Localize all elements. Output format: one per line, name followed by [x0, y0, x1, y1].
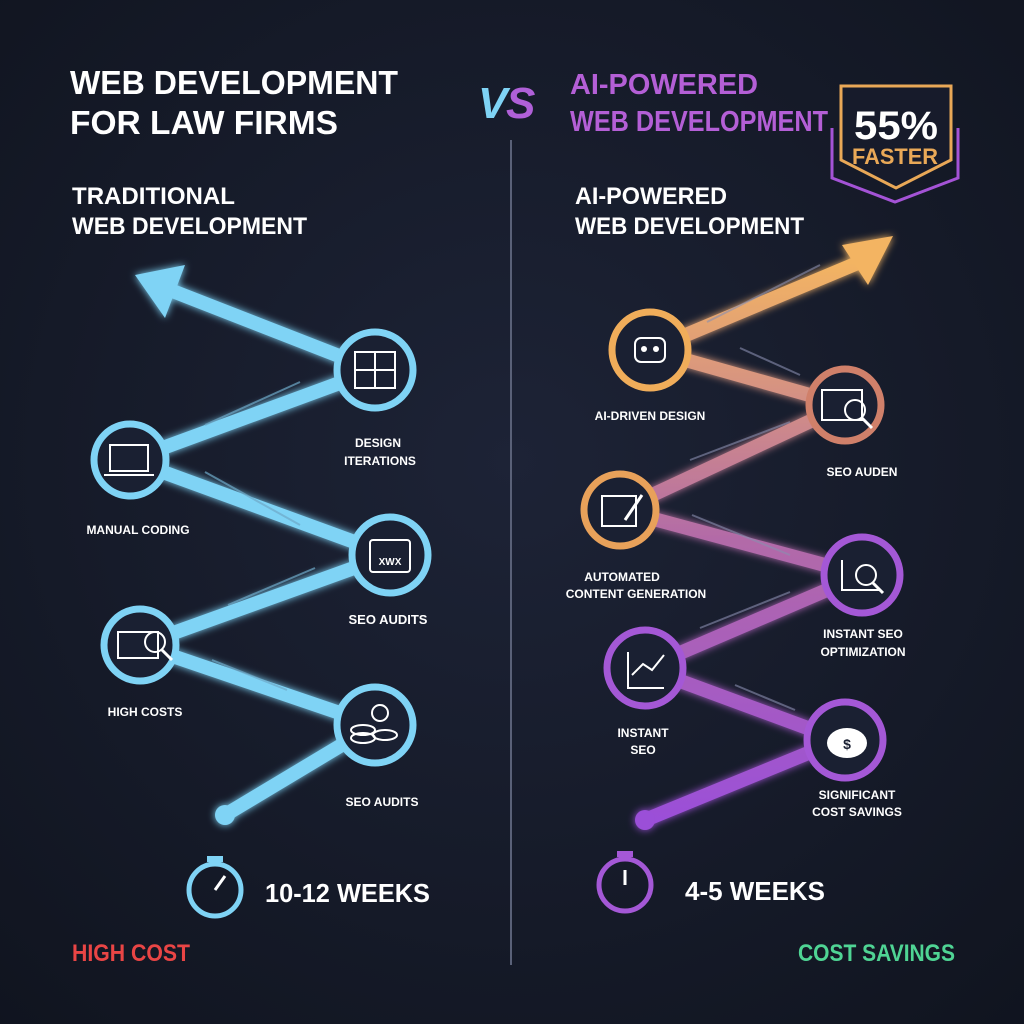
- node: instant seo: [607, 630, 683, 757]
- node: instant seo: SEO: [630, 743, 656, 757]
- node: high costs: HIGH COSTS: [108, 705, 182, 719]
- subtitle right: WEB DEVELOPMENT: [575, 213, 804, 240]
- node: instant seo optimization: INSTANT SEO: [823, 627, 903, 641]
- vs mark: S: [506, 79, 535, 128]
- subtitle right: AI-POWERED: [575, 183, 727, 210]
- node: design iterations: DESIGN: [355, 436, 401, 450]
- node: instant seo optimization: [820, 537, 906, 659]
- node: high costs: [104, 609, 182, 719]
- badge: 55% faster: [832, 86, 958, 202]
- left zigzag path: [130, 265, 390, 825]
- high cost label: HIGH COST: [72, 940, 190, 967]
- stopwatch right: [599, 851, 651, 911]
- node: instant seo: INSTANT: [617, 726, 669, 740]
- node: automated content generation: AUTOMATED: [584, 570, 660, 584]
- badge: 55% faster: 55%: [854, 104, 938, 148]
- subtitle left: [72, 183, 307, 240]
- duration left: 10-12 WEEKS: [265, 878, 430, 908]
- node: significant cost savings: $: [843, 736, 851, 752]
- duration right: 4-5 WEEKS: [685, 876, 825, 906]
- node: ai-driven design: AI-DRIVEN DESIGN: [595, 409, 705, 423]
- node: significant cost savings: COST SAVINGS: [812, 805, 902, 819]
- subtitle left: TRADITIONAL: [72, 183, 235, 210]
- title: FOR LAW FIRMS: [70, 104, 338, 141]
- vs mark: V: [478, 79, 511, 128]
- subtitle left: WEB DEVELOPMENT: [72, 213, 307, 240]
- title: WEB DEVELOPMENT: [70, 64, 398, 101]
- right zigzag path: [620, 236, 893, 830]
- node: seo audits: SEO AUDITS: [349, 612, 428, 627]
- cost savings label: COST SAVINGS: [798, 940, 955, 967]
- right title: [570, 69, 828, 138]
- node: seo audits: [349, 517, 428, 627]
- node: design iterations: [337, 332, 416, 468]
- node: significant cost savings: [807, 702, 902, 819]
- node: seo audits 2: [337, 687, 418, 809]
- badge: 55% faster: FASTER: [852, 144, 938, 169]
- node: manual coding: MANUAL CODING: [86, 523, 190, 537]
- right title: WEB DEVELOPMENT: [570, 106, 828, 138]
- vs mark: [478, 79, 535, 128]
- subtitle right: [575, 183, 804, 240]
- node: design iterations: ITERATIONS: [344, 454, 416, 468]
- node: automated content generation: CONTENT GENERATION: [566, 587, 706, 601]
- node: seo audits 2: SEO AUDITS: [346, 795, 418, 809]
- node: instant seo optimization: OPTIMIZATION: [820, 645, 906, 659]
- node: seo audits: XWX: [379, 557, 402, 568]
- node: seo auden: SEO AUDEN: [827, 465, 897, 479]
- right title: AI-POWERED: [570, 69, 758, 101]
- node: seo auden: [809, 369, 897, 479]
- node: significant cost savings: SIGNIFICANT: [819, 788, 896, 802]
- node: ai-driven design: [595, 312, 705, 423]
- node: manual coding: [86, 424, 190, 537]
- stopwatch left: [189, 856, 241, 916]
- title: [70, 64, 398, 141]
- node: automated content generation: [566, 474, 706, 601]
